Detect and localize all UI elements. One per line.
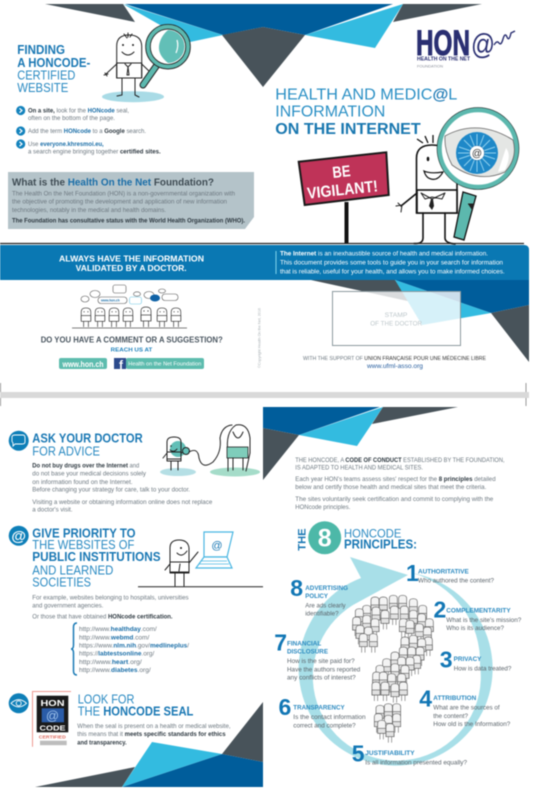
- heading: the 8 HONcode principles: 8: [318, 524, 332, 552]
- principle 5: justifiability: Is all information presented equally?: [365, 759, 467, 766]
- logo: HON Health On the Net Foundation: [416, 24, 515, 69]
- principle 7: financial disclosure: How is the site paid for?: [287, 658, 355, 665]
- gray fold band between pages: [0, 392, 529, 398]
- principle 8: advertising policy: identifiable?: [305, 611, 339, 618]
- section: give priority: PUBLIC INSTITUTIONS: [32, 550, 161, 564]
- text: about the HONcode: Each year HON's teams assess sites' respect for the 8 principles detailed: [295, 476, 496, 483]
- section: ask your doctor: Do not buy drugs over the Internet and: [32, 463, 140, 470]
- illustration: doctor listening to child with stethoscope: [160, 425, 260, 476]
- principle 2: complementarity: What is the site's mission?: [446, 617, 522, 624]
- icon: eye: [9, 693, 29, 713]
- list: how to find certified sites: often on the bottom of the page.: [28, 115, 115, 122]
- section: ask your doctor: do not base your medical decisions solely: [32, 471, 147, 478]
- section: give priority: Or those that have obtained HONcode certification.: [32, 613, 173, 620]
- list: how to find certified sites: Add the term HONcode to a Google search.: [28, 128, 146, 135]
- section: give priority: [9, 526, 189, 620]
- stamp of the doctor box: OF THE DOCTOR: [370, 322, 423, 328]
- principle 4: attribution: the content?: [433, 713, 468, 720]
- principle 5: justifiability: 5: [352, 741, 365, 767]
- principle 6: transparency: TRANSPARENCY: [293, 704, 345, 711]
- principle 7: financial disclosure: [274, 630, 361, 681]
- heading: the 8 HONcode principles: THE: [296, 528, 308, 551]
- principle 4: attribution: ATTRIBUTION: [433, 695, 477, 702]
- section: ask your doctor: ASK YOUR DOCTOR: [32, 432, 143, 446]
- contact question: REACH US AT: [111, 347, 153, 353]
- panel: what is the Health On the Net Foundation: the objective of promoting the development and application of new information: [12, 199, 227, 206]
- section: look for the seal: THE HONCODE SEAL: [78, 704, 194, 718]
- section: ask your doctor: on information found on the Internet.: [32, 479, 133, 486]
- principle 5: justifiability: [352, 741, 467, 767]
- principle 1: authoritative: 1: [406, 560, 419, 586]
- title: health and medical information on the internet: [275, 86, 458, 138]
- icon: at sign: [9, 526, 29, 546]
- section: look for the seal: and transparency.: [77, 739, 127, 746]
- section: give priority: For example, websites belonging to hospitals, universities: [32, 594, 189, 601]
- logo: HON Health On the Net Foundation: HON: [416, 24, 470, 63]
- section: ask your doctor: Before changing your strategy for care, talk to your doctor.: [32, 487, 190, 494]
- illustration: man with magnifier and eye: @: [472, 148, 482, 160]
- section: ask your doctor: Visiting a website or obtaining information online does not replace: [32, 499, 213, 506]
- heading: the 8 HONcode principles: [296, 521, 417, 554]
- principle 1: authoritative: Who authored the content?: [418, 578, 494, 585]
- button: facebook link: f: [119, 358, 124, 372]
- principle 6: transparency: correct and complete?: [293, 722, 356, 729]
- section: give priority: GIVE PRIORITY TO: [32, 526, 136, 540]
- list: how to find certified sites: Use everyone.khresmoi.eu,: [28, 141, 104, 148]
- panel: lower right geometric shapes: [311, 280, 529, 362]
- circular arrow: [299, 557, 493, 766]
- principle 8: advertising policy: ADVERTISING: [305, 585, 348, 592]
- heading: finding a HONcode-certified website: A HONCODE-: [17, 56, 90, 70]
- stamp of the doctor box: [332, 292, 460, 346]
- text block: internet intro in band: [276, 251, 505, 275]
- panel: what is the Health On the Net Foundation: The Health On the Net Foundation (HON) is a non-governmental organization with: [12, 191, 235, 198]
- principle 4: attribution: How old is the Information?: [433, 721, 511, 728]
- principle 3: privacy: [440, 646, 512, 673]
- illustration: man with magnifier and eye: [396, 110, 517, 244]
- heading: the 8 HONcode principles: PRINCIPLES:: [344, 536, 417, 551]
- illustration: question mark of people: [353, 595, 433, 743]
- heading: the 8 HONcode principles: HONCODE: [344, 527, 401, 541]
- list: recommended links with bracket: http://www.diabetes.org/: [79, 667, 151, 674]
- panel: what is the Health On the Net Foundation: technologies, notably in the medical and health domains.: [12, 207, 166, 214]
- principle 3: privacy: PRIVACY: [454, 656, 482, 663]
- ground line above blue band: [0, 242, 524, 244]
- principle 7: financial disclosure: any conflicts of interest?: [287, 674, 356, 681]
- sign: be vigilant: BE: [332, 163, 352, 182]
- section: look for the seal: [9, 692, 231, 747]
- illustration: man with laptop: @: [211, 540, 223, 552]
- principle 7: financial disclosure: FINANCIAL: [287, 641, 321, 648]
- text: about the HONcode: HONcode principles.: [295, 504, 351, 511]
- illustration: people with speech bubbles: www.hon.ch: [100, 298, 120, 302]
- principle 2: complementarity: COMPLEMENTARITY: [446, 608, 511, 615]
- principle 2: complementarity: [434, 596, 522, 632]
- button: website link: www.hon.ch: [62, 360, 104, 369]
- section: ask your doctor: a doctor's visit.: [32, 507, 73, 514]
- panel: always validated by a doctor band: [0, 245, 529, 280]
- principle 8: advertising policy: Are ads clearly: [305, 603, 346, 610]
- icon: HONcode seal: CODE: [40, 724, 66, 732]
- principle 6: transparency: Is the contact information: [293, 714, 366, 721]
- illustration: man with laptop: [138, 532, 263, 587]
- list: recommended links with bracket: http://www.heart.org/: [79, 659, 142, 666]
- section: look for the seal: LOOK FOR: [78, 692, 134, 706]
- principle 7: financial disclosure: DISCLOSURE: [287, 649, 328, 656]
- panel: always validated by a doctor band: ALWAYS HAVE THE INFORMATION: [59, 254, 204, 264]
- contact question: [41, 336, 223, 353]
- button: facebook link: Health on the Net Foundation: [128, 361, 201, 367]
- panel: what is the Health On the Net Foundation: What is the Health On the Net Foundation?: [12, 178, 214, 188]
- principle 4: attribution: [419, 686, 511, 728]
- principle 2: complementarity: Who is its audience?: [446, 625, 504, 632]
- text block: internet intro in band: The Internet is an inexhaustible source of health and medical information.: [280, 251, 488, 258]
- logo: HON Health On the Net Foundation: FOUNDATION: [417, 64, 443, 69]
- principle 6: transparency: 6: [278, 694, 291, 720]
- contact question: DO YOU HAVE A COMMENT OR A SUGGESTION?: [41, 336, 223, 345]
- principle 4: attribution: What are the sources of: [433, 705, 500, 712]
- icon: HONcode seal: @: [46, 708, 59, 723]
- panel: what is the Health On the Net Foundation: [8, 172, 254, 229]
- principle 3: privacy: How is data treated?: [454, 666, 512, 673]
- title: health and medical information on the internet: INFORMATION: [275, 104, 385, 121]
- icon: HONcode seal: [32, 692, 71, 747]
- copyright note: ©Copyright Health On the Net, 2016: [258, 308, 262, 368]
- heading: finding a HONcode-certified website: CERTIFIED: [17, 68, 75, 82]
- sign: be vigilant: VIGILANT!: [306, 178, 379, 203]
- button: facebook link: [114, 358, 204, 372]
- principle 8: advertising policy: [290, 575, 348, 618]
- list: recommended links with bracket: [71, 623, 189, 675]
- heading: finding a HONcode-certified website: [17, 43, 90, 95]
- list: how to find certified sites: On a site, look for the HONcode seal,: [28, 108, 129, 115]
- icon: HONcode seal: HON: [40, 698, 64, 708]
- principle 8: advertising policy: 8: [290, 575, 303, 601]
- section: give priority: SOCIETIES: [32, 576, 91, 590]
- logo: HON Health On the Net Foundation: @: [471, 29, 495, 61]
- title: health and medical information on the internet: HEALTH AND MEDIC @L: [275, 86, 458, 103]
- principle 1: authoritative: AUTHORITATIVE: [418, 569, 469, 576]
- text: about the HONcode: THE HONCODE, A CODE OF CONDUCT ESTABLISHED BY THE FOUNDATION,: [295, 457, 505, 464]
- list: recommended links with bracket: https://www.nlm.nih.gov/medlineplus/: [79, 642, 189, 649]
- list: recommended links with bracket: http://www.webmd.com/: [79, 634, 150, 641]
- principle 7: financial disclosure: Have the authors reported: [287, 666, 361, 673]
- section: give priority: and government agencies.: [32, 602, 104, 609]
- section: ask your doctor: FOR ADVICE: [32, 445, 100, 459]
- panel: lower right top geometric shapes: [263, 407, 458, 480]
- principle 8: advertising policy: POLICY: [305, 593, 329, 600]
- principle 5: justifiability: JUSTIFIABILITY: [365, 750, 415, 757]
- section: look for the seal: When the seal is present on a health or medical website,: [77, 723, 231, 730]
- panel: bottom left geometric shapes: [35, 702, 263, 787]
- section: give priority: AND LEARNED: [32, 563, 113, 577]
- panel: what is the Health On the Net Foundation: The Foundation has consultative status with the World Health Organization (WHO).: [12, 218, 245, 225]
- heading: finding a HONcode-certified website: FINDING: [17, 43, 65, 57]
- icon: HONcode seal: CERTIFIED: [39, 734, 67, 739]
- list: recommended links with bracket: https://labtestsonline.org/: [79, 651, 155, 658]
- text block: internet intro in band: that is reliable, useful for your health, and allows you to make informed choices.: [280, 268, 505, 275]
- principle 1: authoritative: [406, 560, 494, 586]
- principle 4: attribution: 4: [419, 686, 432, 712]
- support text: WITH THE SUPPORT OF UNION FRANÇAISE POUR UNE MÉDECINE LIBRE: [303, 355, 487, 362]
- support text: [303, 355, 487, 370]
- logo: HON Health On the Net Foundation: HEALTH ON THE NET: [417, 56, 470, 62]
- illustration: man holding magnifying glass: [102, 27, 188, 102]
- principle 3: privacy: 3: [440, 646, 453, 672]
- sign: be vigilant: [299, 152, 389, 243]
- list: how to find certified sites: [16, 106, 161, 156]
- illustration: people with speech bubbles: [72, 285, 187, 328]
- icon: at sign: @: [11, 528, 26, 545]
- text: about the HONcode: below and certify those health and medical sites that meet the criteria.: [295, 484, 487, 491]
- list: recommended links with bracket: http://www.healthday.com/: [79, 626, 157, 633]
- text: about the HONcode: The sites voluntarily seek certification and commit to complying with the: [295, 496, 494, 503]
- text block: internet intro in band: This document provides some tools to guide you in your search for information: [280, 259, 503, 266]
- text: about the HONcode: IS ADAPTED TO HEALTH AND MEDICAL SITES.: [295, 464, 423, 471]
- section: look for the seal: this means that it meets specific standards for ethics: [77, 731, 226, 738]
- principle 6: transparency: [278, 694, 366, 729]
- principle 7: financial disclosure: 7: [274, 630, 287, 656]
- panel: top geometric banner: [45, 4, 482, 87]
- section: give priority: THE WEBSITES OF: [32, 538, 135, 552]
- section: ask your doctor: [9, 431, 213, 514]
- icon: speech bubble: [9, 431, 29, 451]
- title: health and medical information on the internet: ON THE INTERNET: [275, 121, 421, 138]
- principle 2: complementarity: 2: [434, 596, 446, 622]
- support text: www.ufml-asso.org: [366, 364, 423, 370]
- text: about the HONcode: [295, 457, 505, 511]
- heading: finding a HONcode-certified website: WEBSITE: [17, 81, 68, 95]
- stamp of the doctor box: STAMP: [385, 313, 407, 319]
- list: how to find certified sites: a search engine bringing together certified sites.: [28, 149, 161, 156]
- panel: always validated by a doctor band: VALIDATED BY A DOCTOR.: [76, 263, 187, 273]
